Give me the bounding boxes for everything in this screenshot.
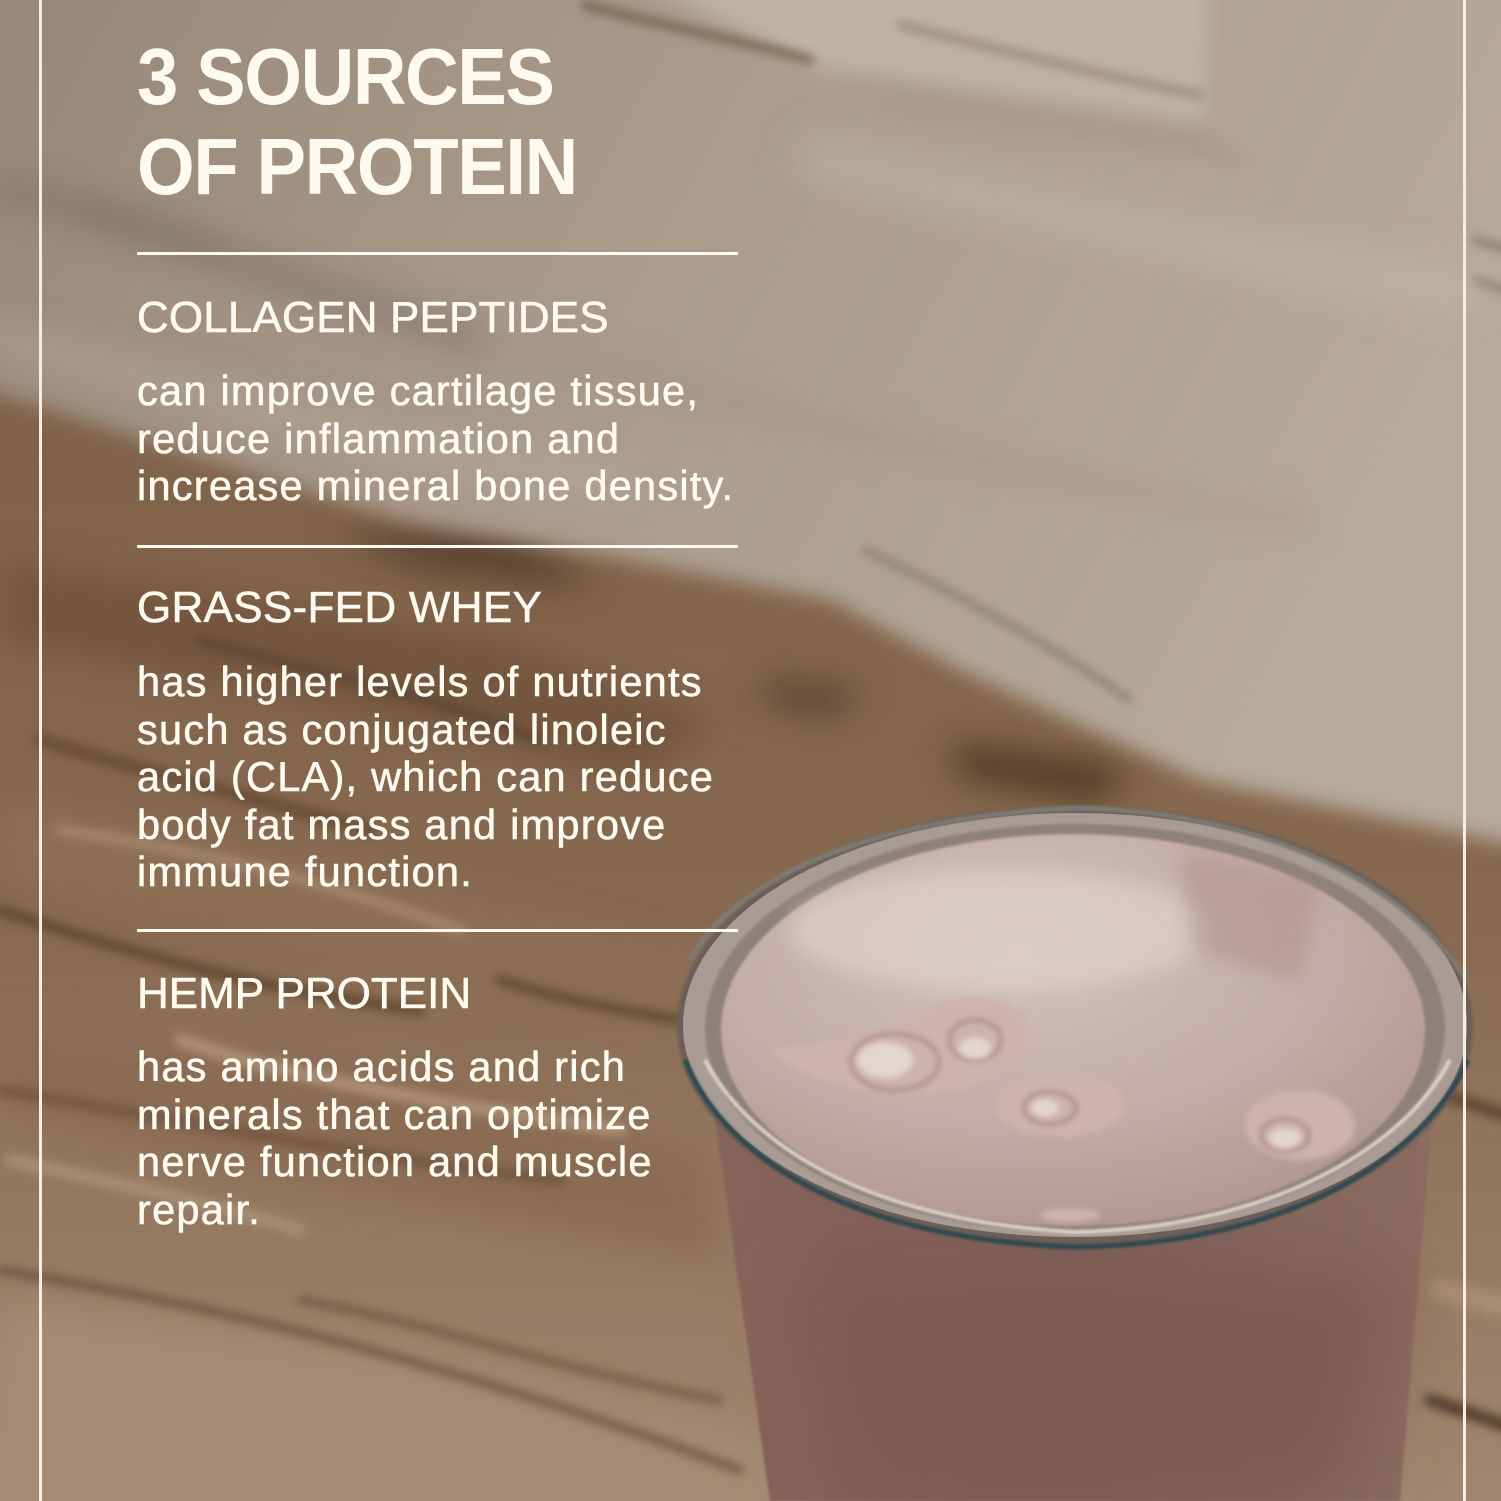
text: whey description: [137, 658, 714, 895]
text: collagen description: increase mineral bone density.: [137, 462, 734, 509]
text: collagen description: [137, 367, 734, 509]
divider top: [137, 252, 738, 255]
title: OF PROTEIN: [137, 122, 577, 211]
section: hemp protein: [137, 969, 653, 1233]
milkshake surface: [721, 834, 1425, 1226]
text: hemp description: minerals that can optimize: [137, 1090, 652, 1138]
title: 3 SOURCES: [137, 32, 554, 121]
text: whey description: has higher levels of nutrients: [137, 658, 703, 705]
table: [0, 560, 780, 1501]
frame: left vertical line: [39, 0, 42, 1501]
text: whey description: body fat mass and improve: [137, 800, 666, 848]
text: whey description: such as conjugated linoleic: [137, 706, 667, 752]
frame: right vertical line: [1463, 0, 1466, 1501]
text: whey description: immune function.: [137, 848, 473, 895]
section: grass-fed whey: [137, 583, 714, 895]
text: collagen description: reduce inflammation and: [137, 414, 620, 462]
title: [137, 32, 577, 211]
jar rim: [677, 806, 1473, 1246]
text: hemp description: [137, 1043, 653, 1233]
divider 2: [137, 545, 738, 548]
jar rim highlights: [685, 808, 1468, 1247]
text: hemp description: nerve function and muscle: [137, 1138, 653, 1185]
jar body: [715, 1120, 1432, 1501]
text: collagen description: can improve cartilage tissue,: [137, 367, 699, 414]
heading: collagen peptides: COLLAGEN PEPTIDES: [137, 293, 609, 342]
text: hemp description: has amino acids and rich: [137, 1043, 626, 1090]
wall and white box: [0, 0, 1501, 850]
text: hemp description: repair.: [137, 1186, 261, 1232]
section: collagen peptides: [137, 293, 734, 509]
divider 3: [137, 929, 738, 932]
heading: grass-fed whey: GRASS-FED WHEY: [137, 583, 542, 632]
text: whey description: acid (CLA), which can reduce: [137, 753, 714, 800]
heading: hemp protein: HEMP PROTEIN: [137, 969, 471, 1018]
